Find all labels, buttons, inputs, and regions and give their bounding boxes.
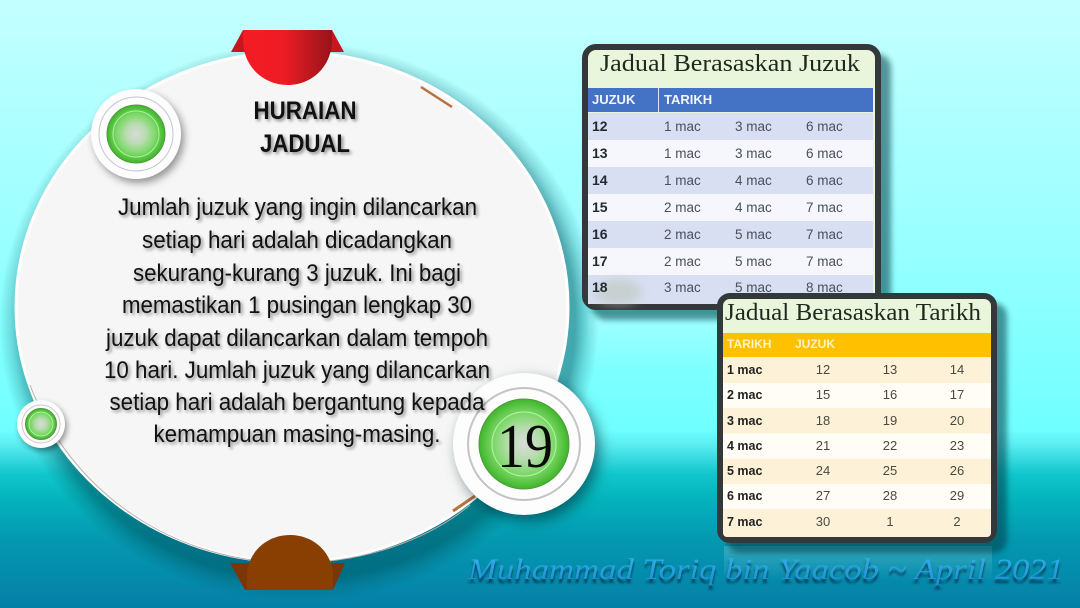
juzuk table rows: 5 mac [735, 227, 772, 242]
juzuk table rows: 2 mac [664, 200, 701, 215]
tarikh table rows: 18 [816, 413, 830, 428]
tarikh table rows: 30 [816, 514, 830, 529]
ribbon: top red tab back [231, 30, 344, 52]
panel: description circle [16, 52, 568, 563]
tarikh table rows: 29 [950, 488, 964, 503]
juzuk table rows: 18 [592, 279, 608, 295]
juzuk table rows: 6 mac [806, 119, 843, 134]
panel: table reflections [588, 314, 992, 580]
juzuk table rows: 5 mac [735, 280, 772, 295]
tarikh table rows: 5 mac [727, 464, 762, 478]
juzuk table header [588, 88, 873, 112]
tarikh table rows [723, 358, 991, 537]
text block: description: sekurang-kurang 3 juzuk. Ini bagi [133, 260, 461, 287]
juzuk table rows: 14 [592, 172, 608, 188]
tarikh table rows: 22 [883, 438, 897, 453]
badge: number 19 [453, 373, 595, 515]
text block: description: kemampuan masing-masing. [154, 421, 440, 448]
tarikh table rows: 23 [950, 438, 964, 453]
juzuk table rows: 7 mac [806, 227, 843, 242]
badge: number 19: 19 [497, 413, 553, 481]
tarikh table rows: 6 mac [727, 489, 762, 503]
tarikh table header: TARIKH [727, 337, 771, 351]
tarikh table rows: 24 [816, 463, 830, 478]
juzuk table rows: 17 [592, 253, 608, 269]
panel: juzuk table [585, 47, 878, 307]
juzuk table header: TARIKH [664, 92, 712, 107]
tarikh table rows: 4 mac [727, 439, 762, 453]
text block: description: setiap hari adalah dicadangkan [142, 227, 452, 254]
icon: small green knob [17, 400, 65, 448]
juzuk table header: JUZUK [592, 92, 636, 107]
text block: description: juzuk dapat dilancarkan dalam tempoh [105, 325, 488, 352]
juzuk table rows: 6 mac [806, 173, 843, 188]
juzuk table rows: 1 mac [664, 119, 701, 134]
juzuk table rows: 3 mac [735, 119, 772, 134]
tick: lower right [453, 496, 475, 511]
tarikh table rows: 25 [883, 463, 897, 478]
heading [254, 97, 356, 158]
juzuk table rows: 1 mac [664, 173, 701, 188]
juzuk table rows: 1 mac [664, 146, 701, 161]
juzuk table rows: 5 mac [735, 254, 772, 269]
icon: large green knob [91, 89, 181, 179]
tarikh table rows: 7 mac [727, 515, 762, 529]
tarikh table rows: 16 [883, 387, 897, 402]
tarikh table rows: 2 mac [727, 388, 762, 402]
tarikh table rows: 19 [883, 413, 897, 428]
juzuk table rows: 6 mac [806, 146, 843, 161]
tick: upper right [421, 87, 452, 107]
text block: description: setiap hari adalah bergantung kepada [110, 389, 485, 416]
ribbon: top red semicircle [243, 30, 332, 85]
juzuk table rows: 7 mac [806, 254, 843, 269]
circle shadow [0, 42, 599, 602]
juzuk table rows [588, 113, 873, 305]
tarikh table rows: 21 [816, 438, 830, 453]
tarikh table rows: 1 mac [727, 363, 762, 377]
text block: description: 10 hari. Jumlah juzuk yang dilancarkan [104, 357, 490, 384]
tarikh table rows: 14 [950, 362, 964, 377]
tarikh table title: Jadual Berasaskan Tarikh [725, 300, 981, 326]
tarikh table rows: 27 [816, 488, 830, 503]
tarikh table header: JUZUK [795, 337, 835, 351]
tarikh table rows: 3 mac [727, 414, 762, 428]
juzuk table title: Jadual Berasaskan Juzuk [600, 51, 860, 77]
ribbon: bottom brown semicircle [247, 535, 333, 590]
tarikh table rows: 1 [886, 514, 894, 529]
juzuk table rows: 13 [592, 145, 608, 161]
juzuk table rows: 8 mac [806, 280, 843, 295]
juzuk table rows: 2 mac [664, 254, 701, 269]
text block: description: Jumlah juzuk yang ingin dilancarkan [118, 194, 477, 221]
heading: HURAIAN [254, 97, 356, 125]
tarikh table rows: 15 [816, 387, 830, 402]
tarikh table rows: 17 [950, 387, 964, 402]
text block: description: memastikan 1 pusingan lengkap 30 [122, 292, 472, 319]
ribbon: bottom brown tab back [230, 563, 345, 590]
juzuk table rows: 16 [592, 226, 608, 242]
tarikh table header [723, 333, 991, 357]
tarikh table rows: 12 [816, 362, 830, 377]
author credit: Muhammad Toriq bin Yaacob ~ April 2021 [467, 553, 1064, 586]
juzuk table rows: 3 mac [664, 280, 701, 295]
tarikh table rows: 2 [953, 514, 961, 529]
panel: tarikh table [720, 296, 994, 540]
juzuk table rows: 3 mac [735, 146, 772, 161]
tarikh table rows: 28 [883, 488, 897, 503]
juzuk table rows: 4 mac [735, 200, 772, 215]
heading: JADUAL [260, 130, 350, 158]
juzuk table rows: 4 mac [735, 173, 772, 188]
juzuk table rows: 2 mac [664, 227, 701, 242]
juzuk table rows: 7 mac [806, 200, 843, 215]
tarikh table rows: 26 [950, 463, 964, 478]
text block: description [104, 194, 490, 448]
tarikh table rows: 13 [883, 362, 897, 377]
tarikh table rows: 20 [950, 413, 964, 428]
juzuk table rows: 15 [592, 199, 608, 215]
juzuk table rows: 12 [592, 118, 608, 134]
